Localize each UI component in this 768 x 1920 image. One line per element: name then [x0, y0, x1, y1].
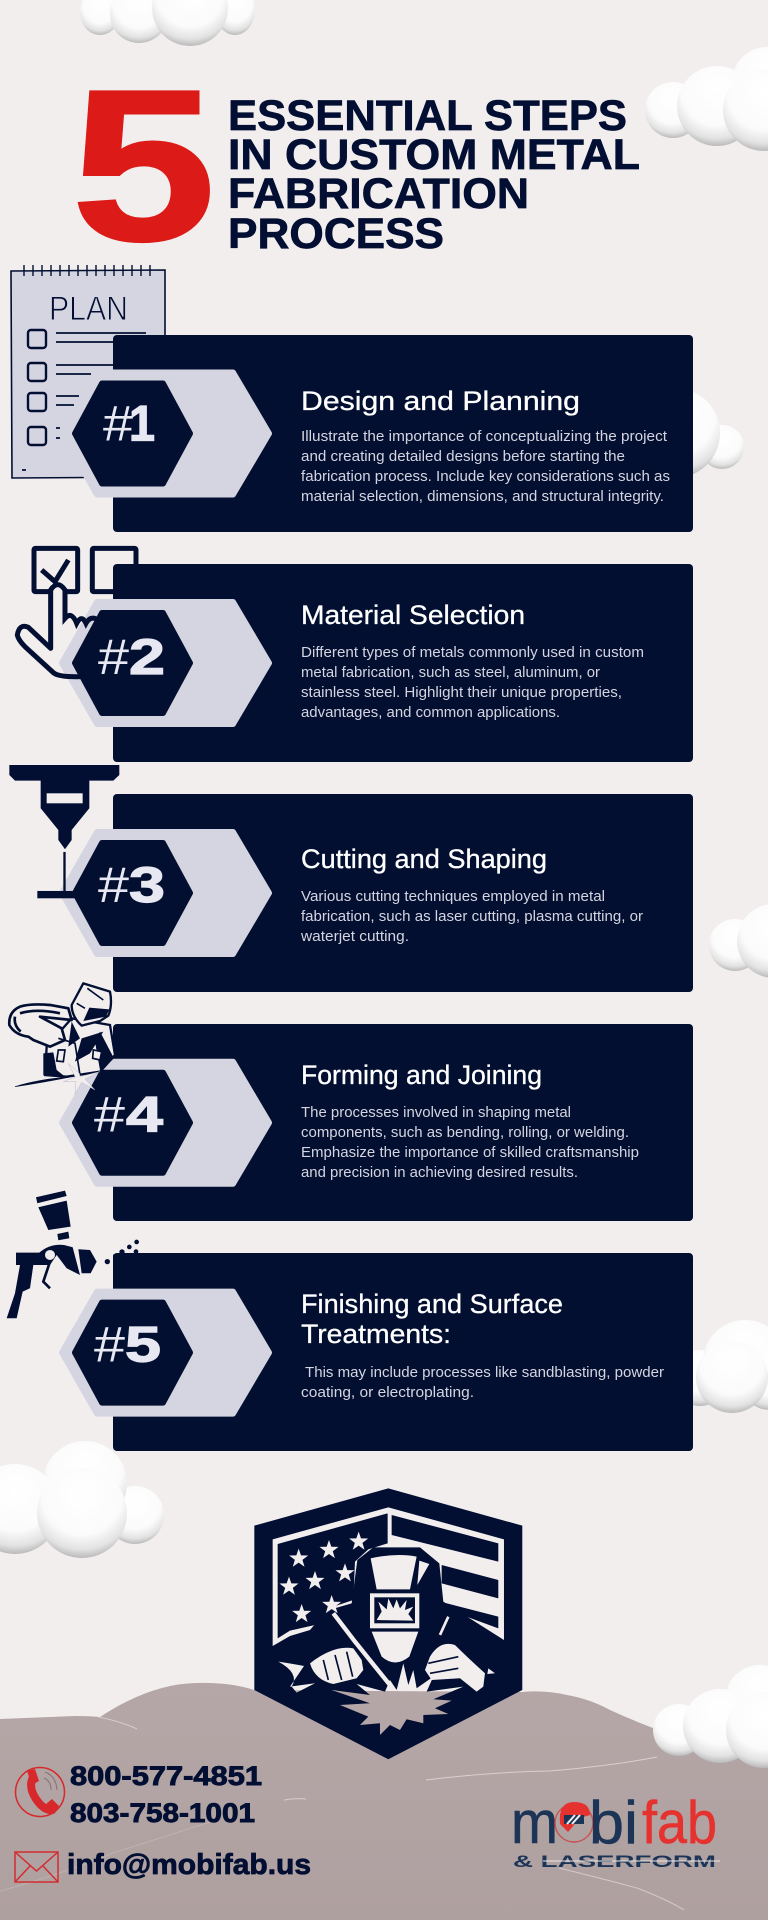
- badge: step 1: #: [103, 396, 133, 452]
- panel: step 1 card: [113, 335, 693, 532]
- icon: laser cutter head: [9, 765, 119, 898]
- badge: step 5: #: [94, 1317, 125, 1373]
- icon: spray gun: [7, 1191, 139, 1318]
- cloud: right of step 5: [672, 1320, 768, 1413]
- step 4 text: and precision in achieving desired results.: [301, 1164, 578, 1181]
- icon: checkboxes: [34, 548, 136, 592]
- cloud: right of step 3: [709, 904, 768, 978]
- badge: step 2: #: [98, 629, 129, 685]
- title: PROCESS: [228, 210, 444, 258]
- step 5 text: [301, 1289, 664, 1401]
- step 1 text: and creating detailed designs before starting the: [301, 448, 625, 465]
- badge plate: step 1: [62, 372, 269, 494]
- icon: welder at work: [9, 983, 115, 1094]
- step 1 text: Illustrate the importance of conceptualizing the project: [301, 428, 668, 445]
- icon: pointing hand: [17, 585, 98, 677]
- step 3 text: waterjet cutting.: [300, 928, 409, 945]
- panel: step 2 card: [113, 564, 693, 762]
- logo: mobifab and laserform: bi: [589, 1789, 638, 1856]
- title: FABRICATION: [228, 170, 529, 218]
- cloud: top right: [645, 47, 768, 151]
- step 3 text: fabrication, such as laser cutting, plasma cutting, or: [301, 908, 643, 925]
- step 1 text: material selection, dimensions, and structural integrity.: [301, 488, 664, 505]
- badge: step 2: [75, 613, 190, 713]
- badge plate: step 4: [62, 1062, 269, 1184]
- badge: step 5: 5: [125, 1317, 161, 1373]
- step 2 text: Different types of metals commonly used in custom: [301, 644, 644, 661]
- title: [228, 92, 640, 258]
- step 5 text: Treatments:: [301, 1319, 451, 1349]
- panel: step 5 card: [113, 1253, 693, 1451]
- step 4 text: Forming and Joining: [301, 1060, 542, 1090]
- logo: mobifab and laserform: fab: [642, 1789, 717, 1856]
- step 4 text: [301, 1060, 639, 1181]
- badge: step 2: 2: [129, 629, 165, 685]
- title: IN CUSTOM METAL: [228, 131, 640, 179]
- badge: step 3: 3: [129, 857, 165, 913]
- step 4 text: The processes involved in shaping metal: [301, 1104, 571, 1121]
- step 2 text: metal fabrication, such as steel, aluminum, or: [301, 664, 600, 681]
- logo: mobifab and laserform: m: [511, 1789, 558, 1856]
- panel: step 4 card: [113, 1024, 693, 1221]
- badge: step 1: [75, 384, 190, 484]
- icon: plan notebook: [11, 265, 165, 478]
- step 4 text: components, such as bending, rolling, or welding.: [301, 1124, 629, 1141]
- logo: mobifab and laserform: & LASERFORM: [513, 1852, 716, 1871]
- badge: step 3: [75, 843, 190, 943]
- logo: mobifab and laserform: [511, 1789, 720, 1871]
- emblem: welder shield: [254, 1488, 522, 1759]
- badge: step 4: [75, 1073, 190, 1173]
- step 1 text: [301, 386, 670, 505]
- step 3 text: Various cutting techniques employed in metal: [301, 888, 605, 905]
- panel: step 3 card: [113, 794, 693, 992]
- cloud: lower left: [0, 1441, 164, 1558]
- badge: step 4: 4: [126, 1087, 163, 1143]
- title: ESSENTIAL STEPS: [228, 92, 627, 140]
- step 2 text: [301, 600, 644, 721]
- step 3 text: Cutting and Shaping: [301, 844, 547, 874]
- cloud: top centre: [80, 0, 255, 46]
- icon: envelope: [15, 1852, 58, 1882]
- cloud: behind step 1: [630, 388, 744, 478]
- icon: phone in ring: [16, 1768, 64, 1816]
- badge plate: step 2: [62, 602, 269, 724]
- email address: info@mobifab.us: [67, 1849, 311, 1881]
- badge: step 4: #: [94, 1087, 125, 1143]
- step 2 text: stainless steel. Highlight their unique properties,: [301, 684, 622, 701]
- step 5 text: Finishing and Surface: [301, 1289, 563, 1319]
- phone numbers: 800-577-4851: [70, 1761, 262, 1791]
- icon: plan notebook: PLAN: [49, 290, 128, 328]
- hills background: [0, 1683, 768, 1920]
- step 3 text: [300, 844, 643, 945]
- badge: step 1: 1: [129, 396, 155, 452]
- big red number five: 5: [71, 44, 216, 286]
- step 4 text: Emphasize the importance of skilled craftsmanship: [301, 1144, 639, 1161]
- step 5 text: This may include processes like sandblasting, powder: [305, 1364, 664, 1381]
- badge plate: step 5: [62, 1292, 269, 1414]
- step 2 text: Material Selection: [301, 600, 525, 630]
- cloud: bottom right: [653, 1665, 768, 1768]
- step 2 text: advantages, and common applications.: [301, 704, 560, 721]
- step 5 text: coating, or electroplating.: [301, 1384, 474, 1401]
- phone numbers: 803-758-1001: [70, 1798, 255, 1828]
- badge plate: step 3: [62, 832, 269, 954]
- step 1 text: Design and Planning: [301, 386, 580, 416]
- step 1 text: fabrication process. Include key considerations such as: [301, 468, 670, 485]
- phone numbers: [70, 1761, 262, 1828]
- badge: step 3: #: [98, 857, 129, 913]
- badge: step 5: [75, 1303, 190, 1403]
